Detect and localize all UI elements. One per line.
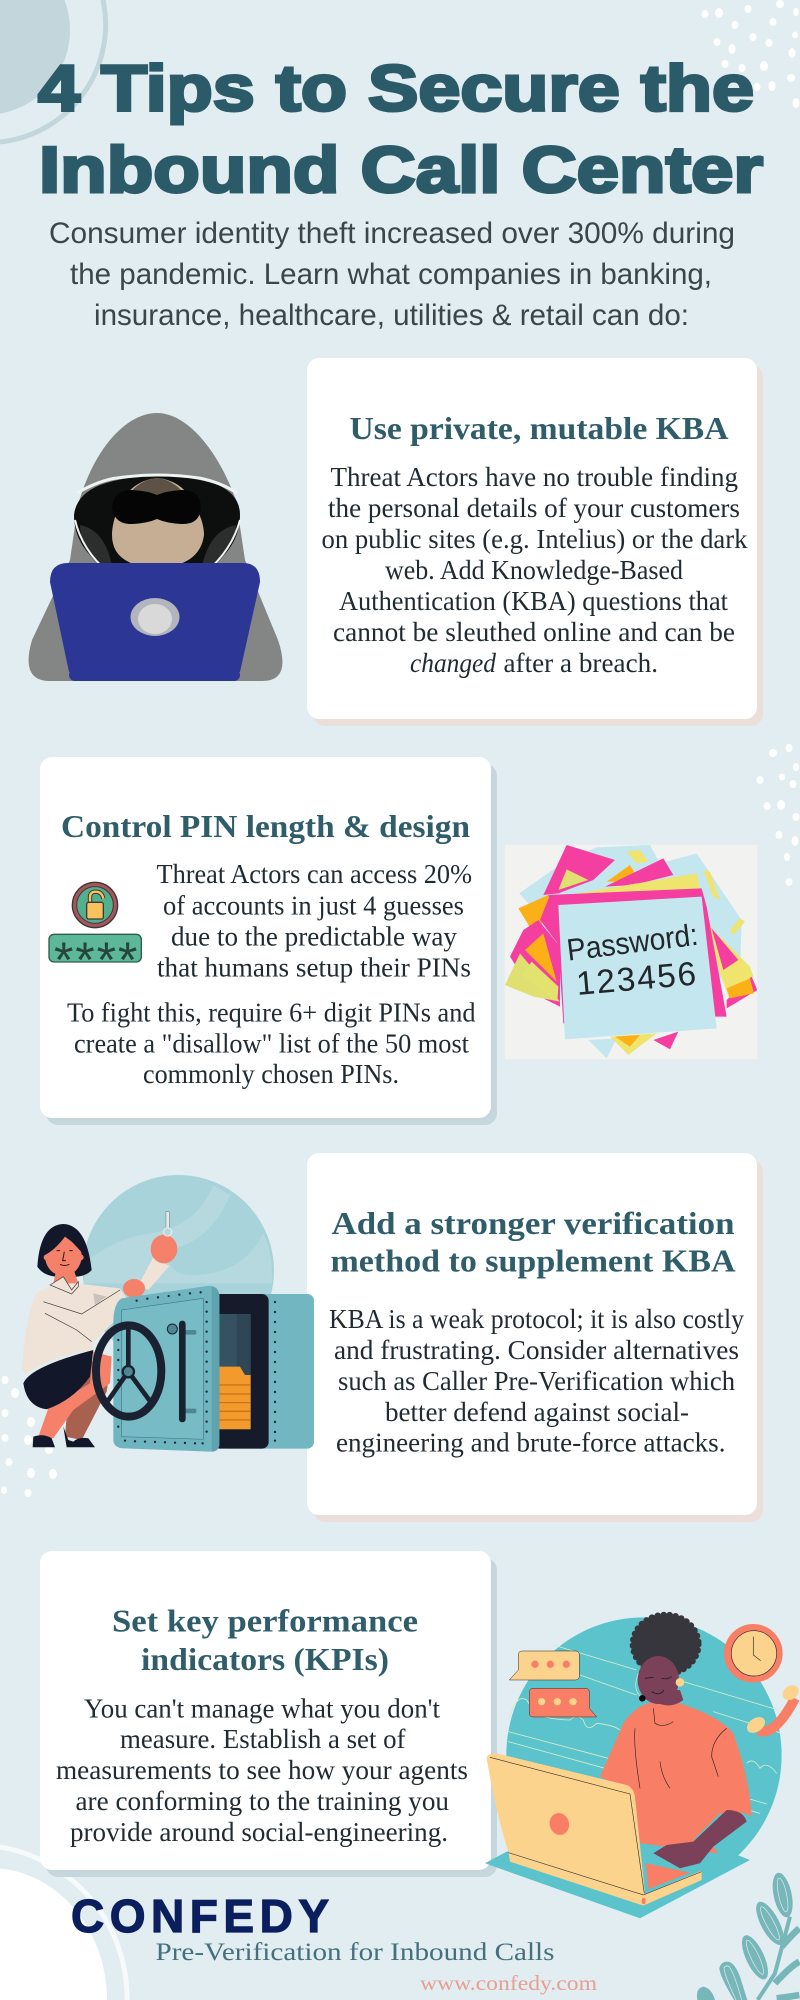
subtitle: Consumer identity theft increased over 300% during	[49, 217, 735, 250]
heading: Add a stronger verification	[332, 1205, 735, 1241]
body text: You can't manage what you don't	[84, 1692, 440, 1724]
body text: create a "disallow" list of the 50 most	[74, 1028, 469, 1058]
body text	[67, 858, 476, 1089]
icon: unlocked padlock and masked PIN: ****	[54, 932, 137, 988]
subtitle: the pandemic. Learn what companies in banking,	[70, 258, 712, 291]
website url: www.confedy.com	[420, 1971, 597, 1995]
body text: of accounts in just 4 guesses	[163, 890, 464, 920]
heading: method to supplement KBA	[330, 1242, 736, 1278]
panel: use private, mutable KBA	[307, 358, 763, 726]
illustration: woman with key opening a safe	[22, 1175, 314, 1452]
heading: Control PIN length & design	[61, 808, 470, 844]
body text: Authentication (KBA) questions that	[339, 585, 728, 616]
body text: provide around social-engineering.	[70, 1816, 448, 1847]
body text	[322, 461, 748, 678]
illustration: call center agent at laptop	[485, 1614, 800, 1918]
panel: add a stronger verification method	[307, 1153, 763, 1522]
body text: due to the predictable way	[171, 920, 457, 952]
subtitle: insurance, healthcare, utilities & retail can do:	[94, 299, 689, 332]
logo: CONFEDY: CONFEDY	[71, 1890, 329, 1942]
body text: web. Add Knowledge-Based	[385, 554, 683, 585]
body text: after a breach.	[504, 647, 658, 678]
body text: and frustrating. Consider alternatives	[334, 1334, 739, 1365]
body text: on public sites (e.g. Intelius) or the dark	[322, 523, 748, 554]
body text	[56, 1692, 468, 1847]
body text: the personal details of your customers	[328, 492, 740, 523]
tagline: Pre-Verification for Inbound Calls	[156, 1939, 554, 1966]
handwritten password: 123456	[575, 956, 698, 1003]
body text: better defend against social-	[385, 1396, 689, 1427]
body text: commonly chosen PINs.	[143, 1058, 399, 1089]
body text: measurements to see how your agents	[56, 1754, 468, 1785]
subtitle	[49, 217, 735, 332]
body text: KBA is a weak protocol; it is also costly	[329, 1303, 744, 1334]
decoration: leaves	[697, 1871, 799, 2000]
panel: control PIN length and design	[40, 757, 497, 1125]
heading: indicators (KPIs)	[141, 1641, 389, 1677]
heading: Use private, mutable KBA	[350, 410, 728, 446]
title	[38, 52, 763, 206]
heading: Set key performance	[112, 1602, 418, 1638]
body text: that humans setup their PINs	[157, 952, 471, 982]
body text: Threat Actors have no trouble finding	[330, 461, 738, 492]
body text: engineering and brute-force attacks.	[336, 1426, 726, 1458]
body text: such as Caller Pre-Verification which	[338, 1365, 735, 1396]
handwritten password: Password:	[565, 918, 700, 968]
body text: cannot be sleuthed online and can be	[333, 616, 735, 647]
body text: changed	[410, 647, 496, 678]
body text: Threat Actors can access 20%	[156, 858, 472, 889]
body text: measure. Establish a set of	[120, 1723, 406, 1754]
photo: pile of sticky notes with password	[505, 845, 757, 1059]
body text: are conforming to the training you	[76, 1785, 449, 1816]
title: Inbound Call Center	[39, 133, 763, 206]
handwritten password	[565, 918, 700, 1003]
icon: unlocked padlock and masked PIN	[49, 882, 141, 988]
body text	[329, 1303, 744, 1458]
heading	[112, 1602, 418, 1677]
icon: hooded hacker with laptop	[29, 413, 282, 681]
heading	[330, 1205, 736, 1278]
body text: To fight this, require 6+ digit PINs and	[67, 996, 476, 1028]
title: 4 Tips to Secure the	[38, 52, 754, 124]
panel: set key performance indicators	[40, 1551, 497, 1877]
